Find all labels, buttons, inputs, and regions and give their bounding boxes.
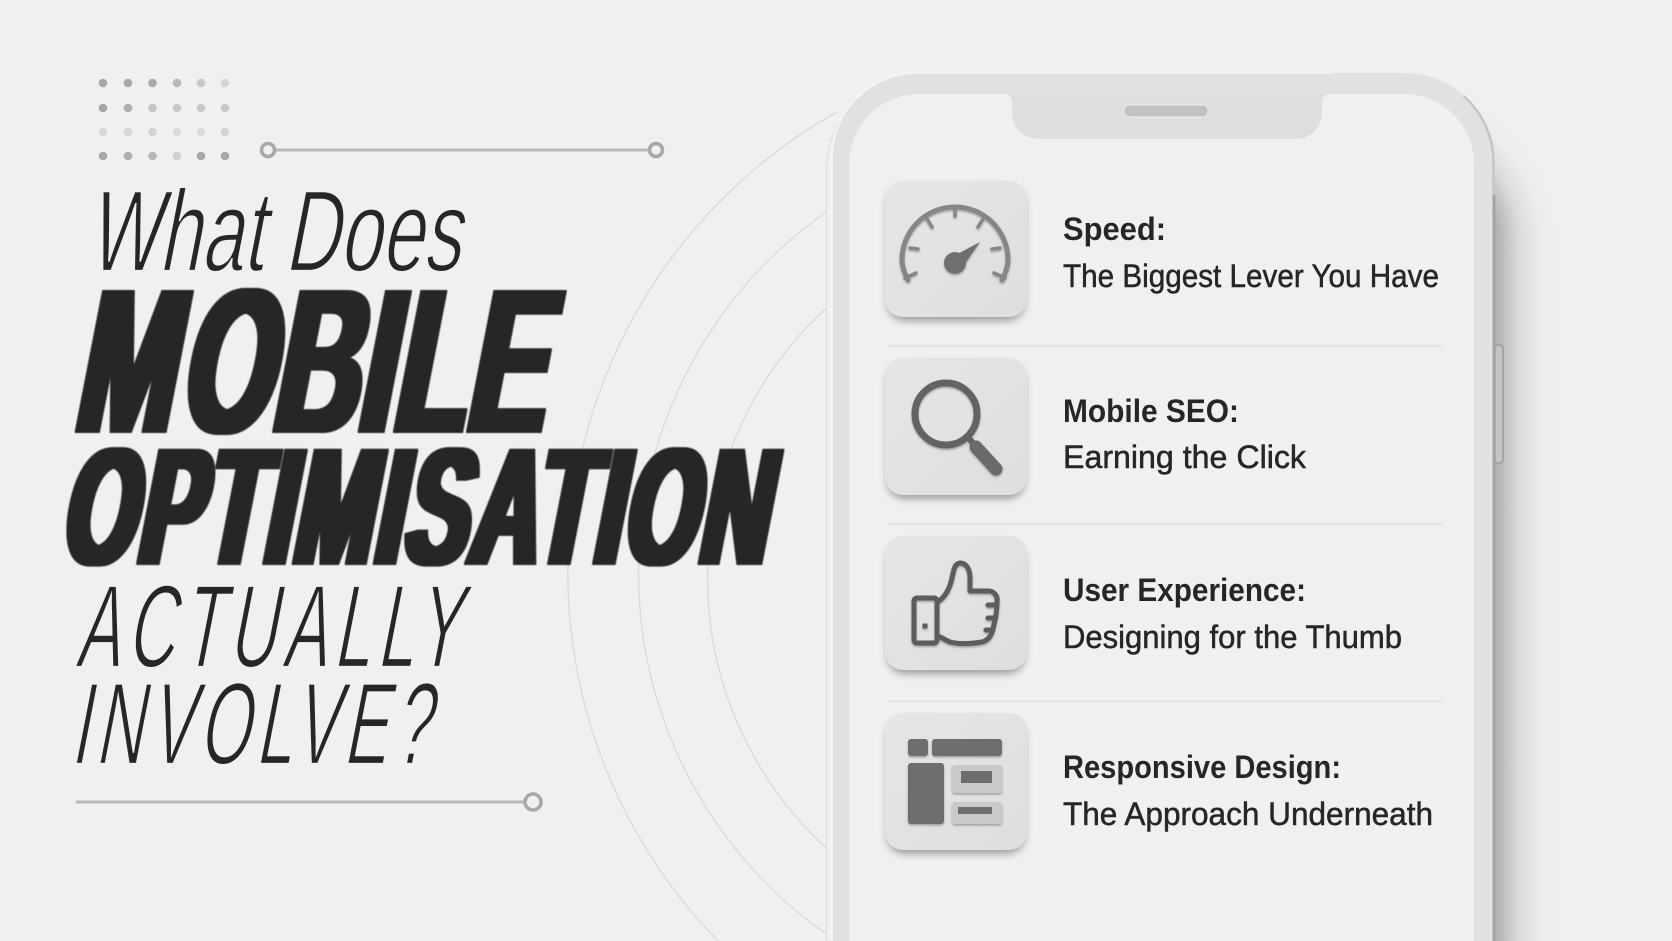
item: user experience (885, 536, 1402, 674)
item: speed (885, 181, 1439, 321)
text: responsive design (1063, 749, 1433, 832)
text: speed: The Biggest Lever You Have (1063, 258, 1439, 294)
title line: OPTIMISATION: OPTIMISATION (52, 413, 796, 599)
icon: magnifying glass (915, 383, 996, 469)
title line: INVOLVE?: INVOLVE? (65, 659, 455, 790)
title (52, 167, 796, 790)
phone outer rim (826, 73, 1000, 941)
item: responsive design (885, 713, 1433, 854)
top connector line (262, 144, 662, 156)
tile (885, 181, 1027, 317)
notch (1004, 94, 1330, 139)
title heavy lines (52, 247, 796, 599)
text: responsive design: The Approach Underneath (1063, 796, 1433, 832)
title line: What Does: What Does (82, 167, 480, 297)
text: speed: Speed: (1063, 211, 1166, 247)
icon: speedometer (902, 207, 1008, 280)
text: user experience: User Experience: (1063, 572, 1306, 608)
tile shadow (887, 187, 1025, 321)
text: mobile seo (1063, 393, 1307, 475)
text: speed (1063, 211, 1439, 294)
icon: page layout (908, 739, 1002, 824)
title line: MOBILE: MOBILE (64, 247, 577, 476)
speaker (1124, 105, 1208, 117)
tile (885, 713, 1027, 850)
phone shadow (1406, 86, 1560, 941)
frame corner edge (1464, 96, 1494, 200)
title line: ACTUALLY: ACTUALLY (70, 560, 486, 693)
tile shadow (887, 542, 1025, 674)
concentric signal arcs (568, 112, 837, 941)
phone (826, 73, 1560, 941)
text: mobile seo: Earning the Click (1063, 439, 1307, 475)
frame dark edge (1492, 195, 1496, 941)
tile shadow (887, 719, 1025, 854)
frame highlight (832, 73, 1330, 941)
text: user experience: Designing for the Thumb (1063, 619, 1402, 655)
text: user experience (1063, 572, 1402, 655)
item: mobile seo (885, 358, 1307, 499)
list dividers (887, 346, 1442, 701)
icon: thumbs up (914, 563, 997, 644)
phone screen (849, 94, 1474, 941)
dot grid (99, 79, 229, 160)
text: responsive design: Responsive Design: (1063, 749, 1341, 785)
tile shadow (887, 364, 1025, 499)
side button (1495, 345, 1503, 463)
text: mobile seo: Mobile SEO: (1063, 393, 1239, 429)
bottom connector line (76, 794, 541, 810)
phone frame (832, 73, 1494, 941)
tile (885, 358, 1027, 495)
tile (885, 536, 1027, 670)
